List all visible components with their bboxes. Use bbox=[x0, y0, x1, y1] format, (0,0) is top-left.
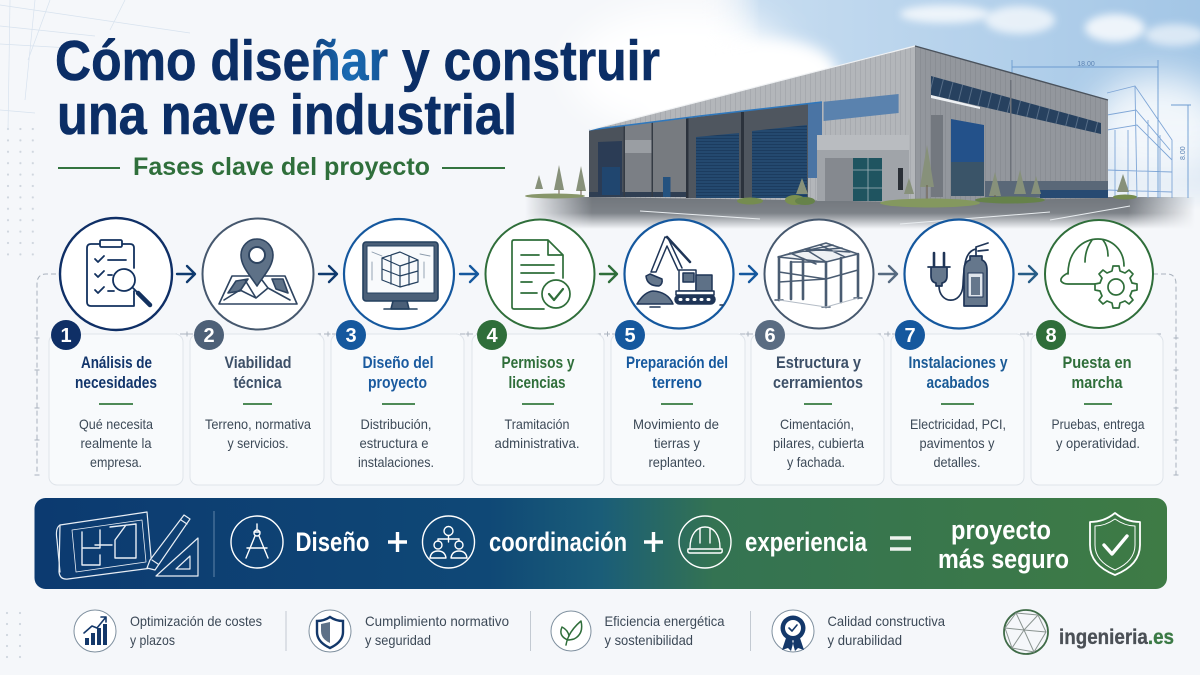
card bbox=[1031, 334, 1163, 485]
icon: map pin bbox=[219, 239, 297, 304]
heading: acabados bbox=[926, 373, 990, 392]
heading: Puesta en bbox=[1062, 353, 1132, 372]
icon: team bbox=[422, 516, 474, 568]
circle bbox=[60, 218, 172, 330]
icon: rosette bbox=[772, 610, 814, 652]
badge: 6 bbox=[764, 325, 776, 347]
result text: más seguro bbox=[938, 544, 1069, 574]
step 4 bbox=[472, 220, 604, 485]
description bbox=[205, 416, 311, 451]
heading: Viabilidad bbox=[224, 353, 292, 372]
icon: helmet and gear bbox=[1061, 239, 1137, 308]
text bbox=[604, 613, 725, 648]
icon: leaf bbox=[551, 611, 591, 651]
heading: Preparación del bbox=[626, 353, 728, 372]
description: pilares, cubierta bbox=[773, 435, 864, 451]
hero: building photo scene: 8.00 bbox=[1180, 146, 1187, 160]
heading: Análisis de bbox=[81, 353, 152, 372]
card bbox=[190, 334, 324, 485]
arrow 7 bbox=[1019, 266, 1037, 282]
badge: 7 bbox=[904, 325, 916, 347]
badge: 2 bbox=[203, 325, 215, 347]
card bbox=[49, 334, 183, 485]
heading: necesidades bbox=[75, 373, 157, 392]
heading: Estructura y bbox=[776, 353, 861, 372]
description: Pruebas, entrega bbox=[1052, 416, 1145, 432]
logo bbox=[1004, 610, 1174, 654]
badge bbox=[895, 320, 925, 350]
description: Cimentación, bbox=[780, 416, 854, 432]
icon: shield check bbox=[1090, 513, 1140, 575]
text: y durabilidad bbox=[828, 632, 902, 648]
text bbox=[828, 613, 945, 648]
icon: excavator bbox=[637, 237, 723, 307]
logo mark bbox=[1004, 610, 1048, 654]
heading bbox=[1062, 353, 1132, 392]
circle bbox=[202, 218, 314, 330]
title: Cómo diseñar y construir bbox=[55, 29, 660, 93]
equals bbox=[890, 538, 911, 549]
heading bbox=[773, 353, 863, 392]
benefit: costs bbox=[74, 610, 262, 652]
blueprint wireframe bbox=[1012, 60, 1191, 198]
arrow 2 bbox=[319, 266, 337, 282]
arrow 4 bbox=[600, 266, 617, 282]
description: instalaciones. bbox=[358, 454, 434, 470]
benefit: energy bbox=[551, 611, 725, 651]
step 2 bbox=[190, 218, 324, 485]
result text bbox=[938, 515, 1069, 574]
dimension lines bbox=[1012, 60, 1191, 198]
card bbox=[331, 334, 464, 485]
description: detalles. bbox=[934, 454, 980, 470]
subtitle: Fases clave del proyecto bbox=[133, 153, 430, 181]
icon: clipboard and magnifier bbox=[87, 240, 150, 306]
circle bbox=[486, 220, 594, 328]
icon: plug and extinguisher bbox=[928, 243, 988, 306]
title: una nave industrial bbox=[57, 83, 517, 147]
step 6 bbox=[751, 220, 884, 485]
heading: Permisos y bbox=[502, 353, 575, 372]
wordmark: ingenieria.es bbox=[1059, 626, 1174, 649]
banner: formula bbox=[34, 498, 1167, 589]
description: administrativa. bbox=[494, 435, 580, 451]
word: coordinación: coordinación bbox=[489, 527, 627, 557]
badge bbox=[615, 320, 645, 350]
badge bbox=[1036, 320, 1066, 350]
description: estructura e bbox=[360, 435, 429, 451]
text: y plazos bbox=[130, 632, 175, 648]
step 8 bbox=[1031, 220, 1163, 485]
title bbox=[55, 29, 660, 147]
benefit: quality bbox=[772, 610, 945, 652]
text bbox=[130, 613, 262, 648]
word: diseño: Diseño bbox=[296, 527, 370, 557]
description: replanteo. bbox=[648, 454, 706, 470]
icon: document with check bbox=[512, 240, 570, 309]
trees and shrubs bbox=[525, 145, 1137, 208]
icon: growth chart bbox=[74, 610, 116, 652]
description: empresa. bbox=[90, 454, 142, 470]
icon: compass bbox=[231, 516, 283, 568]
card bbox=[751, 334, 884, 485]
dimension labels: 18.00 bbox=[1077, 61, 1095, 68]
badge: 8 bbox=[1045, 325, 1057, 347]
hero: building photo scene bbox=[525, 0, 1200, 229]
arrow 5 bbox=[740, 266, 757, 282]
heading bbox=[908, 353, 1008, 392]
heading: Diseño del bbox=[362, 353, 434, 372]
step 3 bbox=[331, 219, 464, 485]
heading: Instalaciones y bbox=[908, 353, 1008, 372]
circle bbox=[904, 220, 1014, 328]
heading bbox=[75, 353, 157, 392]
description bbox=[773, 416, 864, 470]
description: Tramitación bbox=[504, 416, 570, 432]
heading: proyecto bbox=[368, 373, 427, 392]
text: Eficiencia energética bbox=[604, 613, 725, 629]
description bbox=[633, 416, 719, 470]
plus bbox=[644, 532, 663, 552]
heading bbox=[502, 353, 575, 392]
arrow 6 bbox=[879, 266, 897, 282]
badge: 1 bbox=[60, 325, 72, 347]
heading bbox=[224, 353, 292, 392]
badge bbox=[336, 320, 366, 350]
heading: marcha bbox=[1072, 373, 1123, 392]
description: Qué necesita bbox=[79, 416, 153, 432]
text: y seguridad bbox=[365, 632, 431, 648]
description: Distribución, bbox=[360, 416, 432, 432]
description: y servicios. bbox=[228, 435, 288, 451]
heading: cerramientos bbox=[773, 373, 863, 392]
circle bbox=[764, 220, 874, 328]
description: pavimentos y bbox=[920, 435, 994, 451]
text: Cumplimiento normativo bbox=[365, 613, 509, 629]
text: y sostenibilidad bbox=[604, 632, 693, 648]
circle bbox=[344, 219, 454, 329]
text bbox=[365, 613, 509, 648]
description: realmente la bbox=[80, 435, 152, 451]
description bbox=[494, 416, 580, 451]
description: y operatividad. bbox=[1056, 435, 1140, 451]
icon: shield bbox=[309, 610, 351, 652]
description bbox=[1052, 416, 1145, 451]
badge: 3 bbox=[345, 325, 357, 347]
description bbox=[79, 416, 153, 470]
benefit: compliance bbox=[309, 610, 509, 652]
text: Optimización de costes bbox=[130, 613, 262, 629]
icon: steel frame bbox=[775, 243, 862, 307]
plus bbox=[388, 532, 407, 552]
badge bbox=[755, 320, 785, 350]
card bbox=[472, 334, 604, 485]
step 1 bbox=[49, 218, 183, 485]
heading: técnica bbox=[234, 373, 282, 392]
heading: terreno bbox=[652, 373, 702, 392]
badge bbox=[194, 320, 224, 350]
icon: helmet bbox=[679, 516, 731, 568]
building bbox=[589, 46, 1108, 202]
badge: 4 bbox=[486, 325, 498, 347]
dashed process connector bbox=[34, 274, 1178, 475]
arrow 1 bbox=[177, 266, 195, 282]
sky with clouds bbox=[570, 0, 1200, 210]
step 7 bbox=[891, 220, 1024, 485]
description bbox=[910, 416, 1006, 470]
word: experiencia: experiencia bbox=[745, 527, 868, 557]
step 5 bbox=[611, 220, 745, 485]
circle bbox=[624, 220, 734, 328]
heading: licencias bbox=[508, 373, 566, 392]
circle bbox=[1045, 220, 1153, 328]
icon: monitor with 3D frame bbox=[363, 242, 438, 309]
description: Terreno, normativa bbox=[205, 416, 311, 432]
road bbox=[525, 197, 1195, 229]
description: Movimiento de bbox=[633, 416, 719, 432]
heading bbox=[362, 353, 434, 392]
result text: proyecto bbox=[951, 515, 1051, 545]
text: Calidad constructiva bbox=[828, 613, 945, 629]
icon: blueprint, pencil and set square bbox=[56, 512, 198, 579]
description: tierras y bbox=[654, 435, 700, 451]
card bbox=[611, 334, 745, 485]
heading bbox=[626, 353, 728, 392]
badge bbox=[477, 320, 507, 350]
badge: 5 bbox=[624, 325, 636, 347]
badge bbox=[51, 320, 81, 350]
card bbox=[891, 334, 1024, 485]
description bbox=[358, 416, 434, 470]
arrow 3 bbox=[460, 266, 478, 282]
description: y fachada. bbox=[787, 454, 845, 470]
description: Electricidad, PCI, bbox=[910, 416, 1006, 432]
